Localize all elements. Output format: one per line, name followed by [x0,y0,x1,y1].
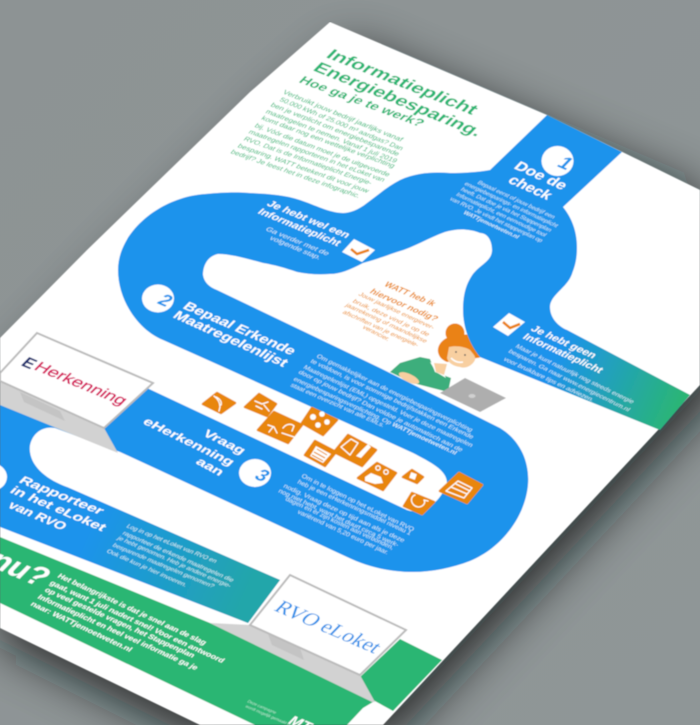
gradient end: no obligation [480,318,690,430]
result: obligation no [493,313,636,413]
step 1 text: van RVO. Je vindt het stappenplan op [448,197,544,244]
step 3 text: nodig. Vraag deze op tijd aan als je deze [282,483,406,544]
heading [255,199,352,249]
icon: sport [245,394,276,416]
step 1 [448,146,578,244]
heading: Informatieplicht [520,332,606,376]
icon: fuel [403,470,423,483]
step 4 heading: in het eLoket [7,484,111,534]
step 4 heading: van RVO [5,499,70,533]
title: Informatieplicht [322,46,483,118]
icons: measures [203,393,482,514]
step 3 text: Om in te loggen op het eLoket van RVO [300,473,416,533]
closing text: Informatieplicht en heel veel informatie ga je [36,593,200,672]
icon: stethoscope [404,493,434,514]
step 1 text: Bepaal eerst of jouw bedrijf een [476,180,556,220]
number 2 badge: 2 [153,291,177,311]
step 2 text: Maatregelenlijst (EML) opgesteld. Voer je deze maatregelen [302,364,475,449]
intro text: Verbruikt jouw bedrijf jaarlijks vanaf [281,90,404,143]
step 1 heading [504,159,571,203]
laptop: eHerkenning [0,333,153,453]
step 1 text: Informatieplicht, een eenvoudige tool [454,193,547,238]
step 1 heading: check [504,173,556,203]
callout: what do I need: bruik, deze vind je op de [351,299,432,338]
illustration: woman with laptop [390,324,506,412]
step 2 text: door op jouw bedrijf? Dan voldoe je automatisch aan de [297,369,465,454]
text [264,227,331,261]
intro text: bedrijf? Je leest het in deze infographic. [229,149,362,200]
step 2 heading [170,299,300,369]
eHerkenning logo: Herkenning [30,360,131,408]
title: Hoe ga je te werk? [296,74,428,129]
eHerkenning logo [17,354,131,408]
step 2 text [289,353,476,456]
intro text: komt daar nog een wettelijke verplichting [259,115,396,170]
intro text: bij. Vóór die datum moet je de uitgevoerde [253,123,391,178]
step 4 [0,463,236,590]
step 1 text: heeft. Dat doe je via het Stappenplan [459,187,553,233]
title: Energiebesparing. [309,59,487,140]
number 1 badge: 1 [552,154,578,174]
closing text [29,572,227,672]
step 4 text: Ook die kun je hier invoeren. [105,548,189,588]
step 2 heading: Bepaal Erkende [180,299,300,358]
step 4 text: je hebt genomen. Heb je andere energie- [115,535,233,589]
step 4 text: Log in op het eLoket van RVO en [125,523,219,565]
text: Maar je kunt natuurlijk nog steeds energie [514,344,636,405]
intro text: RVO. Dat is de Informatieplicht Energie- [242,136,373,187]
step 3 [140,415,416,556]
icon: check box [342,239,375,262]
step 4 heading: Rapporteer [16,474,108,517]
step 3 heading: eHerkenning [140,415,238,468]
heading: Je hebt wel een [264,199,352,240]
heading: Informatieplicht [255,207,344,249]
callout: what do I need: hiervoor nodig? [368,287,441,323]
text: besparen. Ga naar www.energiecentrum.nl [507,349,632,413]
callout: what do I need: verancier. [361,325,392,343]
step 4 text: besparende maatregelen genomen? [111,542,216,590]
closing text: op veel gestelde vragen, het Stappenplan [43,586,198,659]
eHerkenning logo: E [17,354,41,372]
text: Ga verder met de [264,227,331,257]
intro text: besparing. WATT betekent dit voor jouw [236,143,370,194]
green band left [0,537,373,725]
number 3 badge: 3 [250,466,274,486]
closing text: gaat, want 1 juli nadert snel! Voor een antwoord [48,579,227,665]
icon: bread and bottle [334,435,376,466]
intro text: maatregelen rapporteren in het eLoket van [247,129,386,184]
step 1 text [448,180,559,244]
credit and logo: Deze campagne [246,699,278,715]
gradient band: report [40,487,280,623]
number 2 badge [142,284,177,312]
callout: what do I need: afschriften van je energiele- [341,310,420,348]
callout: what do I need: Jouw jaarlijkse energiever- [357,292,436,331]
icon: quill [203,393,235,413]
heading: Je hebt geen [528,324,599,361]
callout: what do I need: jaarrekening of maandelijkse [343,302,429,345]
icon: check box [493,313,525,336]
blue winding path [0,115,690,623]
text: volgende stap. [268,236,323,261]
step 1 text: WATTjemoetweten.nl [461,211,520,240]
laptop: RVO eLoket [210,575,406,702]
icon: oven [440,473,482,503]
step 3 text: dagen en er zijn kosten aan verbonden, [284,496,395,551]
icon: coins [302,408,337,435]
intro text: ben je verplicht om energiebesparende [269,102,401,158]
title [296,46,487,140]
number 3 badge [239,459,274,487]
step 3 text: variërend van 5,20 euro per jaar. [296,509,390,556]
number 4 badge [0,463,7,491]
step 2 [142,284,476,456]
step 4 text [105,523,236,590]
credit and logo [244,699,317,725]
step 3 heading [140,415,249,478]
step 4 text: rapporteer de erkende maatregelen die [121,530,236,584]
step 3 text: nog niet hebt, want het duurt circa 5 werk- [277,488,400,549]
step 3 text [277,473,416,556]
RVO eLoket label: RVO eLoket [270,596,387,657]
icon: running and swimming [258,412,302,443]
step 3 text: heb je een eHerkenningsmiddel niveau 1 [296,479,413,537]
icon: building [305,441,336,466]
step 1 heading: Doe de [510,159,571,193]
step 3 heading: Vraag [200,427,249,457]
step 3 heading: aan [193,455,227,478]
closing text: Het belangrijkste is dat je snel aan de slag [56,572,209,647]
intro text [229,90,405,200]
text [502,344,636,413]
text: voor bruikbare tips en adviezen. [502,357,596,403]
step 2 heading: Maatregelenlijst [170,308,292,369]
step 2 text: te voldoen, is voor sommige bedrijfstakken een Erkende [309,358,476,441]
callout: what do I need: WATT heb ik [382,280,438,308]
closing text: naar: WATTjemoetweten.nl [29,600,134,653]
green band right [360,639,442,711]
icon: car and bicycle [358,463,396,490]
intro text: maatregelen te nemen. Vanaf 1 juli 2019 [264,109,399,165]
result: obligation yes [255,199,375,262]
intro text: 50.000 kWh of 25.000 m³ aardgas? Dan [278,97,405,152]
step 2 text: Om gemakkelijker aan de energiebesparingsverplichting [315,353,475,434]
step 1 text: energiebesparings- en informatieplicht [463,182,559,229]
step 4 heading [5,474,111,534]
step 2 text: staat een overzicht van alle EMLs. [289,382,386,429]
callout: what do I need [341,280,441,348]
step 2 text: energiebesparingsverplichting. Op WATTjemoetweten.nl [292,376,459,456]
